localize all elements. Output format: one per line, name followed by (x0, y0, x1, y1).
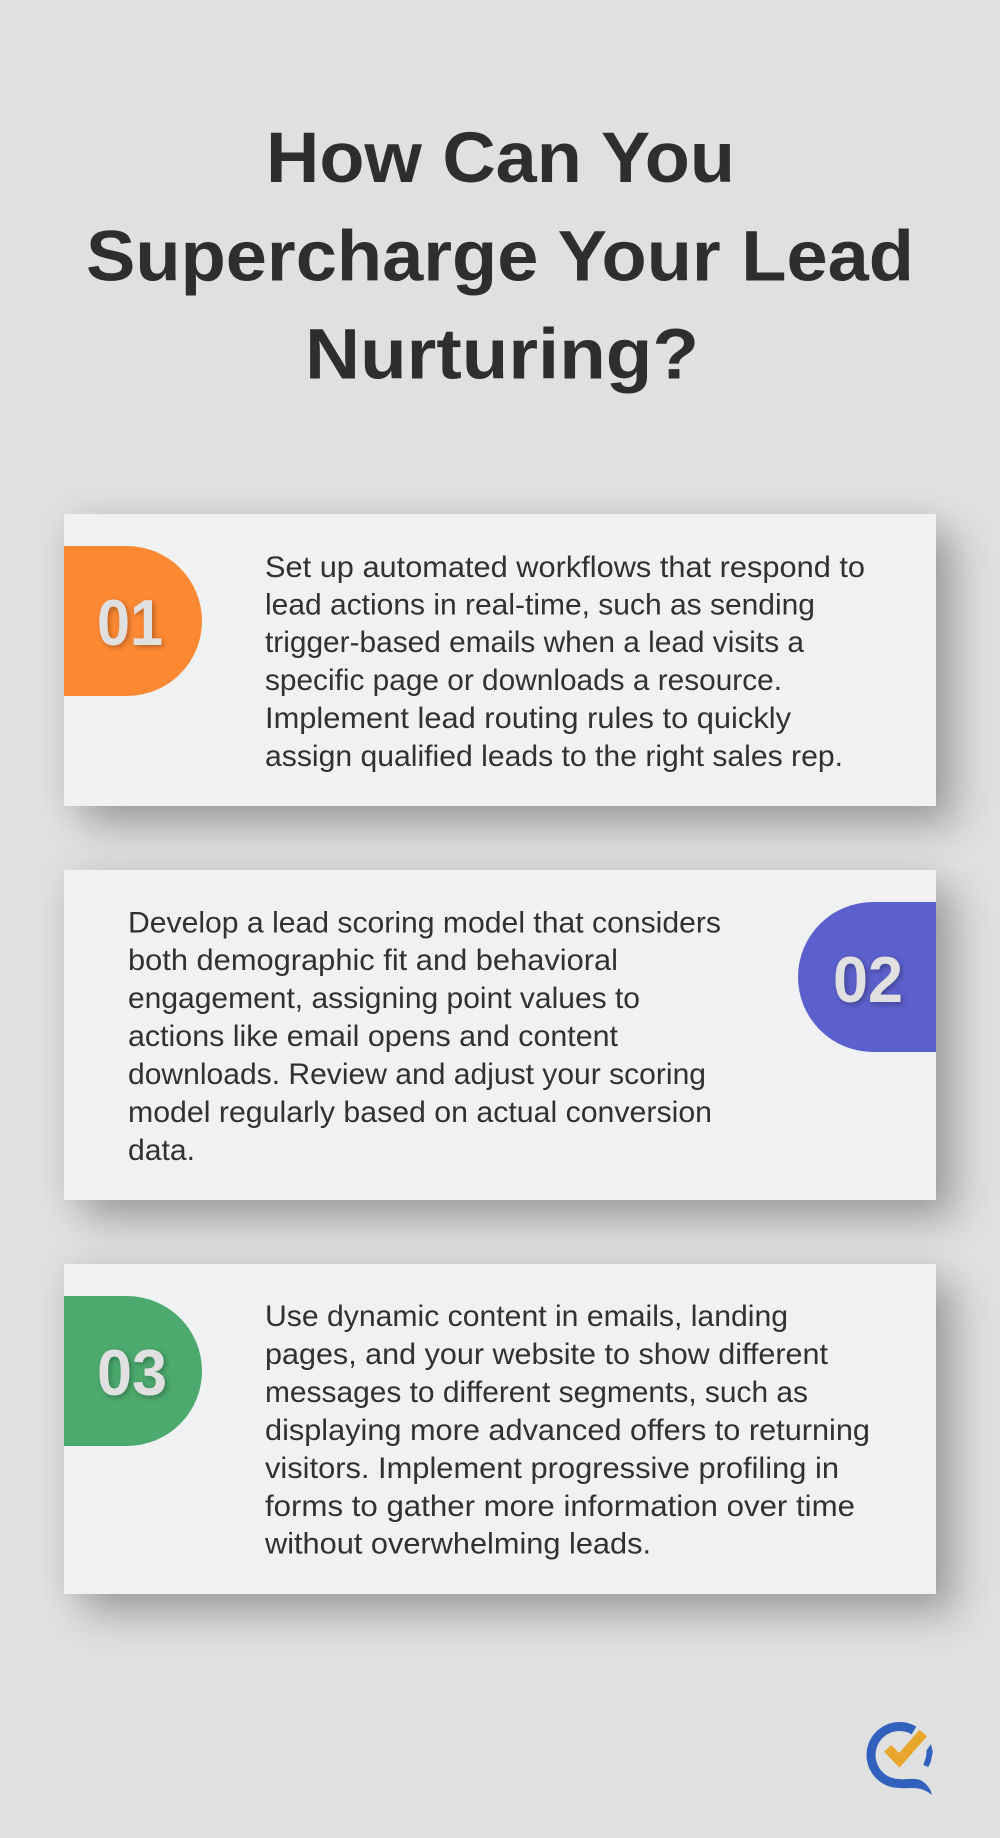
step 3 text: forms to gather more information over time (265, 1490, 855, 1523)
step 3 text: pages, and your website to show different (265, 1338, 828, 1371)
step 1 text (265, 551, 865, 773)
step 3 text: without overwhelming leads. (264, 1528, 651, 1560)
step 2 text: Develop a lead scoring model that considers (128, 906, 721, 940)
step 1 text: assign qualified leads to the right sales rep. (265, 740, 843, 773)
step 3 badge: 03 (97, 1336, 167, 1409)
step 1 text: lead actions in real-time, such as sending (265, 588, 815, 622)
step 3 text (264, 1300, 870, 1560)
step 2 badge: 02 (833, 943, 903, 1016)
step 1 text: Set up automated workflows that respond to (265, 551, 865, 584)
step 3 text: visitors. Implement progressive profiling in (265, 1452, 839, 1485)
icon: logo speech bubble with check mark (871, 1727, 933, 1795)
step 2 text: both demographic fit and behavioral (128, 944, 618, 977)
title: Nurturing? (305, 316, 699, 394)
title: How Can You (266, 119, 735, 198)
step 1 badge: 01 (97, 586, 163, 659)
step 2 text: data. (128, 1134, 195, 1167)
panel: step 2 lead scoring (64, 870, 956, 1220)
step 3 badge (64, 1296, 202, 1446)
step 1 badge (64, 546, 202, 696)
step 3 text: messages to different segments, such as (265, 1376, 808, 1409)
step 2 text: downloads. Review and adjust your scoring (128, 1058, 706, 1091)
step 2 text: actions like email opens and content (128, 1020, 618, 1053)
step 2 text: model regularly based on actual conversion (128, 1096, 712, 1129)
step 2 badge (798, 902, 936, 1052)
step 1 text: Implement lead routing rules to quickly (265, 702, 791, 735)
step 2 text: engagement, assigning point values to (128, 982, 640, 1015)
panel: step 3 dynamic content (64, 1264, 956, 1614)
title (86, 119, 914, 394)
title: Supercharge Your Lead (86, 218, 914, 296)
step 1 text: specific page or downloads a resource. (265, 664, 782, 697)
step 3 text: Use dynamic content in emails, landing (265, 1300, 788, 1333)
panel: step 1 automated workflows (64, 514, 956, 826)
step 3 text: displaying more advanced offers to returning (265, 1414, 870, 1447)
step 2 text (128, 906, 721, 1167)
step 1 text: trigger-based emails when a lead visits a (265, 626, 805, 659)
